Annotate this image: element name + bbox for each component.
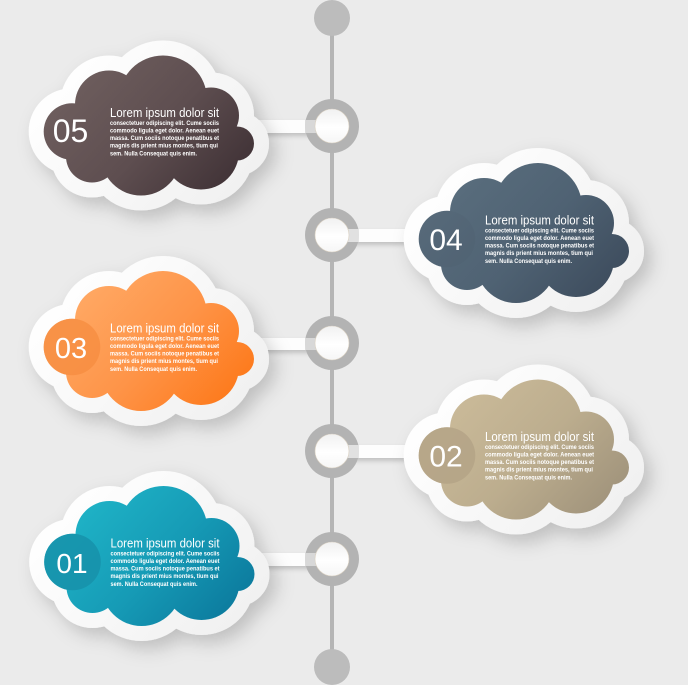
text block 01 xyxy=(110,536,220,588)
text block 04: massa. Cum sociis notoque penatibus et xyxy=(485,242,595,250)
text block 01: consectetuer odipiscing elit. Cume sociis xyxy=(110,550,220,558)
text block 05: consectetuer odipiscing elit. Cume sociis xyxy=(110,120,219,127)
text block 03: consectetuer odipiscing elit. Cume sociis xyxy=(110,336,219,342)
text block 03: Lorem ipsum dolor sit xyxy=(110,320,219,336)
text block 01: massa. Cum sociis notoque penatibus et xyxy=(110,566,220,572)
text block 03: commodo ligula eget dolor. Aenean euet xyxy=(110,343,220,350)
panel: cloud 02 xyxy=(419,380,629,520)
text block 02: consectetuer odipiscing elit. Cume sociis xyxy=(485,444,594,451)
text block 05: commodo ligula eget dolor. Aenean euet xyxy=(110,128,220,134)
text block 04: Lorem ipsum dolor sit xyxy=(485,212,594,228)
text block 02: massa. Cum sociis notoque penatibus et xyxy=(485,459,595,466)
connector: 02 xyxy=(340,445,410,458)
text block 03: sem. Nulla Consequat quis enim. xyxy=(110,366,197,373)
node 03 xyxy=(305,316,359,370)
text block 04: magnis dis prient mius montes, tium qui xyxy=(485,250,593,257)
timeline spine xyxy=(314,0,350,685)
panel: cloud 04 xyxy=(419,163,629,303)
text block 03 xyxy=(110,320,220,373)
number 03: 03 xyxy=(55,333,87,365)
text block 04: sem. Nulla Consequat quis enim. xyxy=(485,258,572,265)
text block 04: consectetuer odipiscing elit. Cume sociis xyxy=(485,228,594,234)
text block 02: commodo ligula eget dolor. Aenean euet xyxy=(485,452,595,458)
connector: 01 xyxy=(255,553,325,566)
number 01: 01 xyxy=(56,548,88,579)
text block 05: Lorem ipsum dolor sit xyxy=(110,105,219,120)
text block 05: magnis dis prient mius montes, tium qui xyxy=(110,142,218,150)
number 02: 02 xyxy=(429,440,463,474)
connector: 04 xyxy=(340,229,410,242)
text block 01: commodo ligula eget dolor. Aenean euet xyxy=(110,558,220,565)
node 02 xyxy=(305,424,359,478)
connector: 03 xyxy=(255,338,325,350)
node 04 xyxy=(305,208,359,262)
text block 05: massa. Cum sociis notoque penatibus et xyxy=(110,135,220,142)
text block 02: Lorem ipsum dolor sit xyxy=(485,429,594,444)
panel: cloud 05 xyxy=(44,56,254,196)
text block 01: magnis dis prient mius montes, tium qui xyxy=(110,573,219,580)
text block 01: Lorem ipsum dolor sit xyxy=(110,536,220,550)
connector: 05 xyxy=(255,120,325,133)
node 05 xyxy=(305,99,359,153)
text block 03: magnis dis prient mius montes, tium qui xyxy=(110,358,218,365)
text block 04: commodo ligula eget dolor. Aenean euet xyxy=(485,235,595,242)
text block 02: sem. Nulla Consequat quis enim. xyxy=(485,474,572,482)
text block 05 xyxy=(110,105,220,158)
panel: cloud 03 xyxy=(44,271,254,411)
node 01 xyxy=(305,532,359,586)
number 04: 04 xyxy=(429,224,463,257)
text block 05: sem. Nulla Consequat quis enim. xyxy=(110,150,197,158)
text block 02 xyxy=(485,429,595,482)
number 05: 05 xyxy=(53,113,88,149)
text block 04 xyxy=(485,212,595,265)
text block 03: massa. Cum sociis notoque penatibus et xyxy=(110,350,220,358)
text block 02: magnis dis prient mius montes, tium qui xyxy=(485,466,593,474)
text block 01: sem. Nulla Consequat quis enim. xyxy=(110,581,198,588)
panel: cloud 01 xyxy=(44,486,255,626)
